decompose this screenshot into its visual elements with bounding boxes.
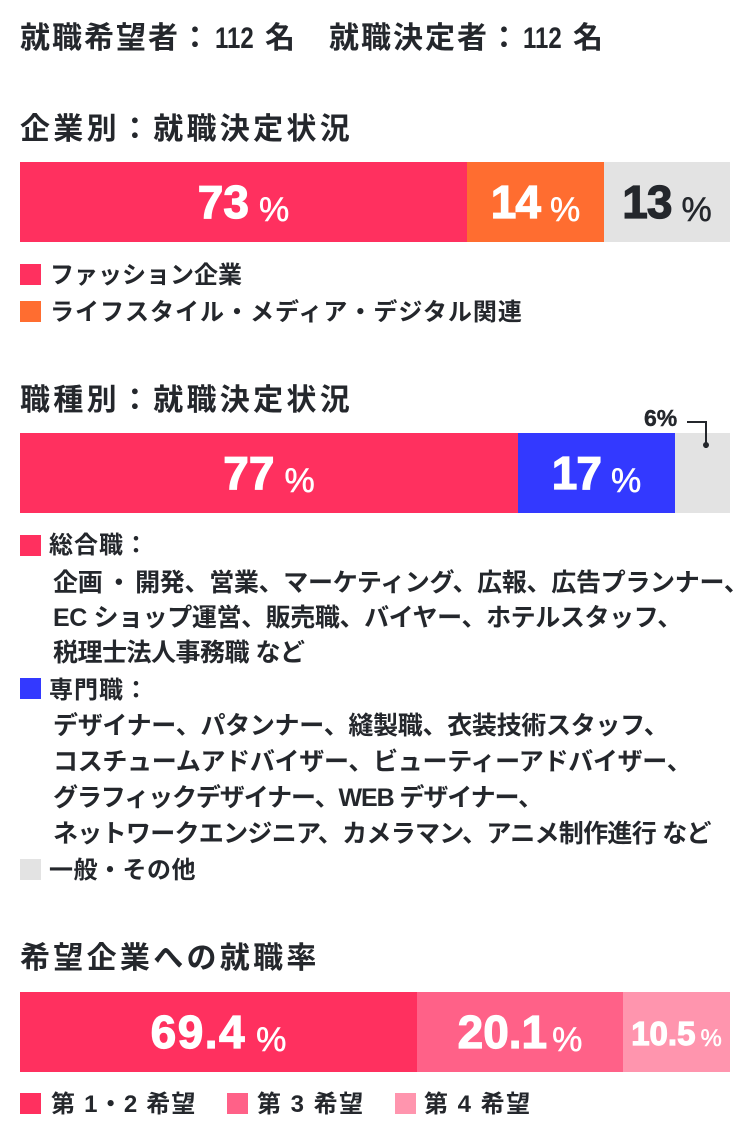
- legend: general career with examples: [20, 532, 749, 667]
- summary: applicants and placements: 就職希望者：: [20, 22, 212, 55]
- legend: specialist with examples: ネットワークエンジニア、カメラマン、アニメ制作進行 など: [53, 820, 711, 848]
- segment: first and second choice 69.4%: 69.4 %: [151, 1006, 286, 1059]
- legend: specialist with examples: [20, 677, 712, 848]
- legend: general career with examples: 総合職：: [49, 532, 149, 559]
- legend: specialist with examples: グラフィックデザイナー、WEB デザイナー、: [53, 784, 542, 812]
- segment: lifestyle media digital 14%: 14 %: [491, 176, 580, 229]
- legend: specialist with examples: 専門職：: [49, 677, 149, 704]
- legend: general and other: 一般・その他: [49, 857, 196, 884]
- legend: fourth choice: 第 4 希望: [424, 1091, 532, 1118]
- heading: preferred company placement rate: 希望企業への就職率: [20, 942, 320, 975]
- stacked bar: company type: [20, 162, 730, 242]
- segment: fashion companies 73%: 73 %: [198, 176, 289, 229]
- heading: placement by job type: 職種別：就職決定状況: [20, 384, 353, 417]
- summary: applicants and placements: 就職決定者：: [329, 22, 521, 55]
- segment: fashion companies 73%: [20, 162, 467, 242]
- legend: specialist with examples: コスチュームアドバイザー、ビューティーアドバイザー、: [53, 748, 691, 776]
- callout: 6% label: 6%: [644, 405, 677, 431]
- segment: third choice 20.1%: [417, 992, 623, 1072]
- legend: fashion companies: ファッション企業: [50, 262, 242, 289]
- segment: other 13%: 13 %: [622, 176, 712, 229]
- summary: applicants and placements: 112: [523, 22, 562, 55]
- legend: specialist with examples: デザイナー、パタンナー、縫製職、衣装技術スタッフ、: [53, 712, 669, 740]
- legend: first and second choice: 第 1・2 希望: [51, 1091, 197, 1118]
- segment: first and second choice 69.4%: [20, 992, 417, 1072]
- segment: fourth choice 10.5%: [623, 992, 730, 1072]
- legend: general career with examples: 企画・開発、営業、マーケティング、広報、広告プランナー、: [53, 569, 749, 597]
- segment: lifestyle media digital 14%: [467, 162, 604, 242]
- summary: applicants and placements: 名: [265, 22, 295, 55]
- segment: other 13%: [604, 162, 730, 242]
- segment: specialist 17%: [518, 433, 675, 513]
- summary: applicants and placements: 112: [215, 22, 254, 55]
- stacked bar: preference rate: [20, 992, 730, 1072]
- callout: 6% label: [644, 405, 709, 448]
- segment: general career 77%: 77 %: [223, 447, 315, 500]
- summary: applicants and placements: 名: [573, 22, 603, 55]
- legend: third choice: 第 3 希望: [257, 1091, 365, 1118]
- stacked bar: job type: [20, 433, 730, 513]
- legend: general career with examples: 税理士法人事務職 など: [53, 639, 304, 667]
- summary: applicants and placements: [20, 22, 603, 55]
- legend: general career with examples: EC ショップ運営、販売職、バイヤー、ホテルスタッフ、: [53, 604, 682, 632]
- segment: third choice 20.1%: 20.1%: [458, 1006, 582, 1059]
- segment: specialist 17%: 17 %: [552, 447, 641, 500]
- segment: general career 77%: [20, 433, 518, 513]
- heading: placement by company: 企業別：就職決定状況: [20, 113, 353, 146]
- segment: other 6%: [675, 433, 730, 513]
- legend: lifestyle media digital: ライフスタイル・メディア・デジタル関連: [50, 299, 523, 326]
- segment: fourth choice 10.5%: 10.5%: [631, 1015, 722, 1052]
